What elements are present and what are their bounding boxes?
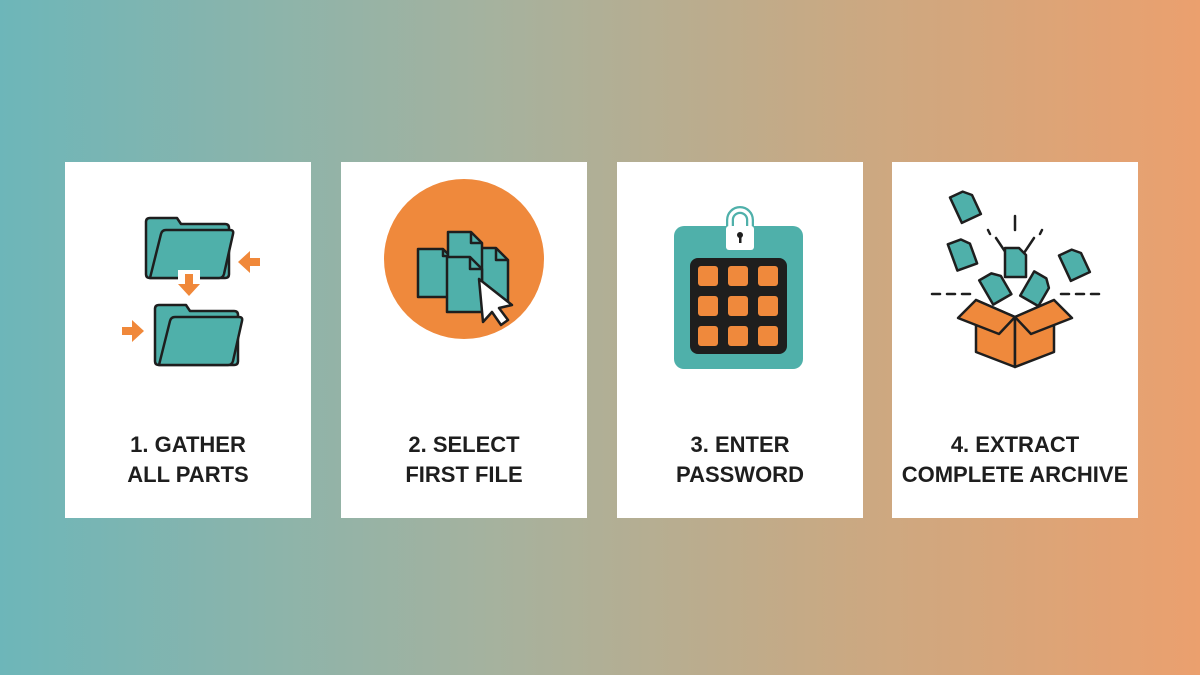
- label: PASSWORD: [676, 462, 804, 487]
- label: 2. SELECT: [408, 432, 520, 457]
- icon: files with cursor in orange circle: [384, 179, 544, 339]
- label: COMPLETE ARCHIVE: [902, 462, 1128, 487]
- label: [405, 432, 523, 487]
- label: 4. EXTRACT: [951, 432, 1079, 457]
- label: FIRST FILE: [405, 462, 523, 487]
- label: [127, 432, 249, 487]
- icon: open box with files: [930, 190, 1100, 368]
- icon: folders with arrows: [122, 216, 260, 366]
- label: [902, 432, 1128, 487]
- card 2: select first file: [341, 162, 587, 518]
- card 4: extract complete archive: [892, 162, 1138, 518]
- label: 1. GATHER: [130, 432, 246, 457]
- label: [676, 432, 804, 487]
- card 3: enter password: [617, 162, 863, 518]
- label: ALL PARTS: [127, 462, 249, 487]
- label: 3. ENTER: [690, 432, 790, 457]
- icon: keypad with lock: [674, 206, 803, 369]
- card 1: gather all parts: [65, 162, 311, 518]
